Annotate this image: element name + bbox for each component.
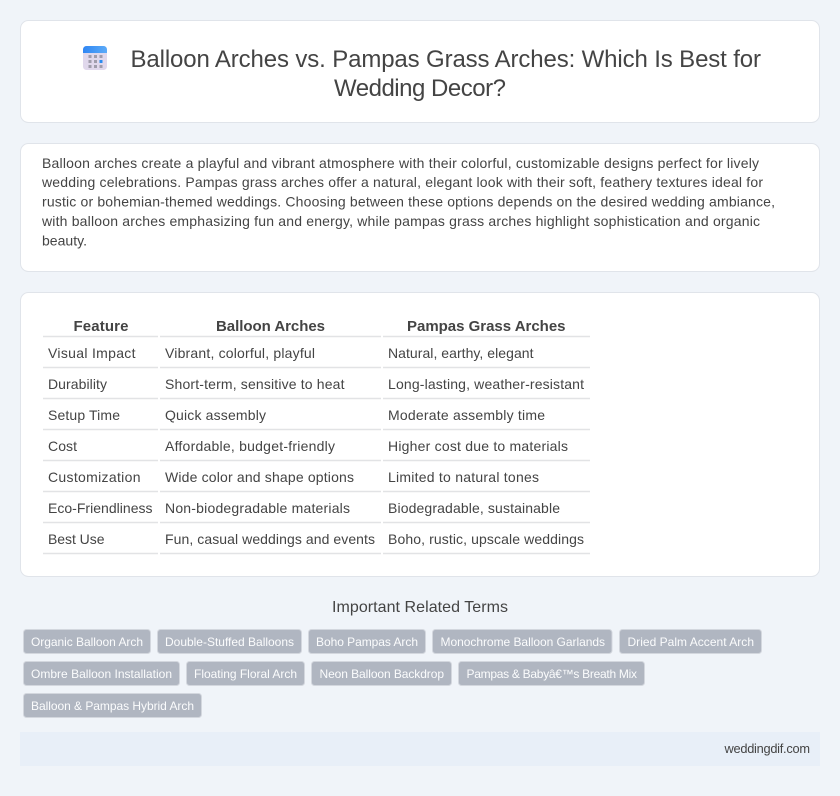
table row: durability: Short-term, sensitive to heat [165, 376, 345, 392]
table header: Balloon Arches [216, 318, 325, 335]
table row: durability [48, 376, 584, 392]
table row: setup time: Moderate assembly time [388, 407, 545, 423]
tag: Dried Palm Accent Arch [628, 635, 754, 649]
panel: comparison table [20, 292, 820, 576]
text block: introduction paragraph: wedding celebrations. Pampas grass arches offer a natural, elegant look with their soft, feathery textures ideal for [41, 174, 763, 190]
tag [158, 630, 302, 654]
table row: cost: Higher cost due to materials [388, 438, 568, 454]
tag: Balloon & Pampas Hybrid Arch [31, 699, 194, 713]
heading: important related terms: Important Related Terms [332, 599, 508, 616]
table row: best use: Fun, casual weddings and events [165, 531, 375, 547]
tag: Organic Balloon Arch [31, 635, 143, 649]
table row: best use: Boho, rustic, upscale weddings [388, 531, 584, 547]
table row: customization [48, 469, 539, 485]
table header: Pampas Grass Arches [407, 318, 566, 335]
text block: introduction paragraph: rustic or bohemian-themed weddings. Choosing between these options depends on the desired wedding ambiance, [42, 194, 775, 210]
tag group: related terms [24, 630, 762, 718]
table row: eco-friendliness [48, 500, 560, 516]
tag [308, 630, 426, 654]
table row: visual impact: Natural, earthy, elegant [388, 345, 534, 361]
text block: introduction paragraph: Balloon arches create a playful and vibrant atmosphere with their colorful, customizable designs perfect for lively [42, 155, 759, 171]
tag [186, 662, 304, 686]
table row: eco-friendliness: Eco-Friendliness [48, 500, 152, 516]
table row: eco-friendliness: Biodegradable, sustainable [388, 500, 560, 516]
panel: title header [20, 20, 820, 122]
footer: weddingdif.com [724, 741, 810, 756]
table header [74, 318, 566, 335]
table row: durability: Long-lasting, weather-resistant [388, 376, 584, 392]
table row: visual impact: Visual Impact [48, 345, 136, 361]
tag: Neon Balloon Backdrop [320, 667, 444, 681]
title: Balloon Arches vs. Pampas Grass Arches: Which Is Best for [130, 46, 761, 73]
table row: customization: Wide color and shape options [165, 469, 354, 485]
text block: introduction paragraph: beauty. [42, 232, 87, 248]
text block: introduction paragraph [41, 155, 775, 248]
tag: Monochrome Balloon Garlands [440, 635, 605, 649]
table row: customization: Limited to natural tones [388, 469, 539, 485]
footer [20, 732, 820, 766]
table row: visual impact [48, 345, 534, 361]
tag [24, 694, 202, 718]
text block: introduction paragraph: with balloon arches emphasizing fun and energy, while pampas grass arches highlight sophistication and organic [41, 213, 760, 229]
table header: Feature [74, 318, 128, 335]
tag [24, 662, 180, 686]
tag: Floating Floral Arch [194, 667, 297, 681]
icon: calendar [83, 46, 107, 70]
table row: visual impact: Vibrant, colorful, playful [165, 345, 315, 361]
table row: durability: Durability [48, 376, 107, 392]
table row: cost: Cost [48, 438, 77, 454]
title [130, 46, 761, 102]
table row: best use [48, 531, 584, 547]
table row: setup time: Quick assembly [165, 407, 266, 423]
table row: cost: Affordable, budget-friendly [165, 438, 335, 454]
table row: eco-friendliness: Non-biodegradable materials [165, 500, 350, 516]
table row: cost [48, 438, 568, 454]
tag: Pampas & Babyâ€™s Breath Mix [466, 667, 637, 681]
tag [432, 630, 612, 654]
tag: Ombre Balloon Installation [31, 667, 172, 681]
tag [312, 662, 452, 686]
tag: Double-Stuffed Balloons [165, 635, 294, 649]
title: Wedding Decor? [334, 75, 506, 102]
table row: best use: Best Use [48, 531, 105, 547]
panel: introduction [20, 144, 820, 272]
table row: customization: Customization [48, 469, 140, 485]
tag [458, 662, 644, 686]
table row: setup time [48, 407, 545, 423]
tag: Boho Pampas Arch [316, 635, 418, 649]
tag [620, 630, 762, 654]
tag [24, 630, 150, 654]
table row: setup time: Setup Time [48, 407, 120, 423]
